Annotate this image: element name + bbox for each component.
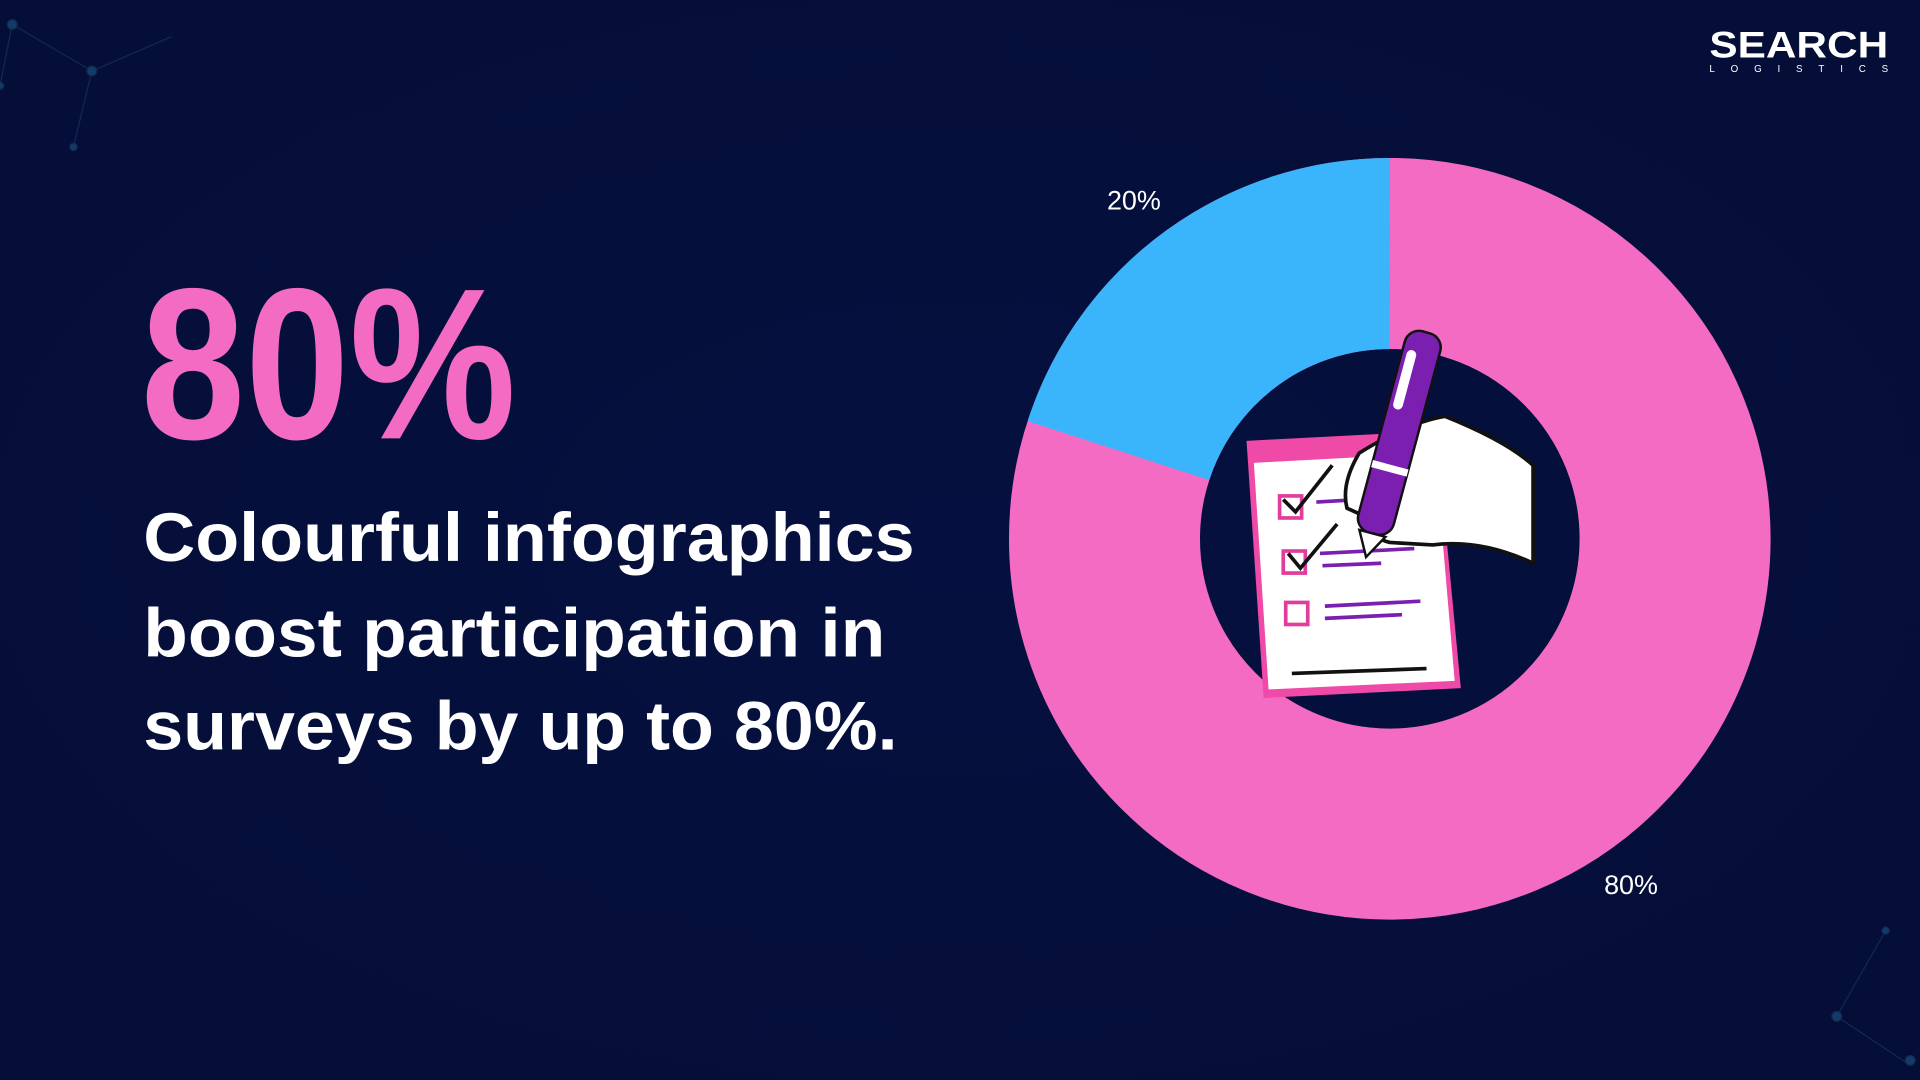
donut chart <box>1030 179 1749 898</box>
body text <box>143 499 915 764</box>
body text: boost participation in <box>143 594 885 671</box>
logo <box>1709 25 1889 75</box>
label 20%: 20% <box>1107 185 1161 215</box>
logo: SEARCH <box>1709 25 1888 66</box>
body text: surveys by up to 80%. <box>143 687 898 764</box>
headline stat: 80% <box>141 243 516 484</box>
icon: clipboard with hand and pen <box>1247 328 1533 698</box>
logo: LOGISTICS <box>1709 64 1889 75</box>
label 80%: 80% <box>1604 870 1658 900</box>
body text: Colourful infographics <box>143 499 915 576</box>
